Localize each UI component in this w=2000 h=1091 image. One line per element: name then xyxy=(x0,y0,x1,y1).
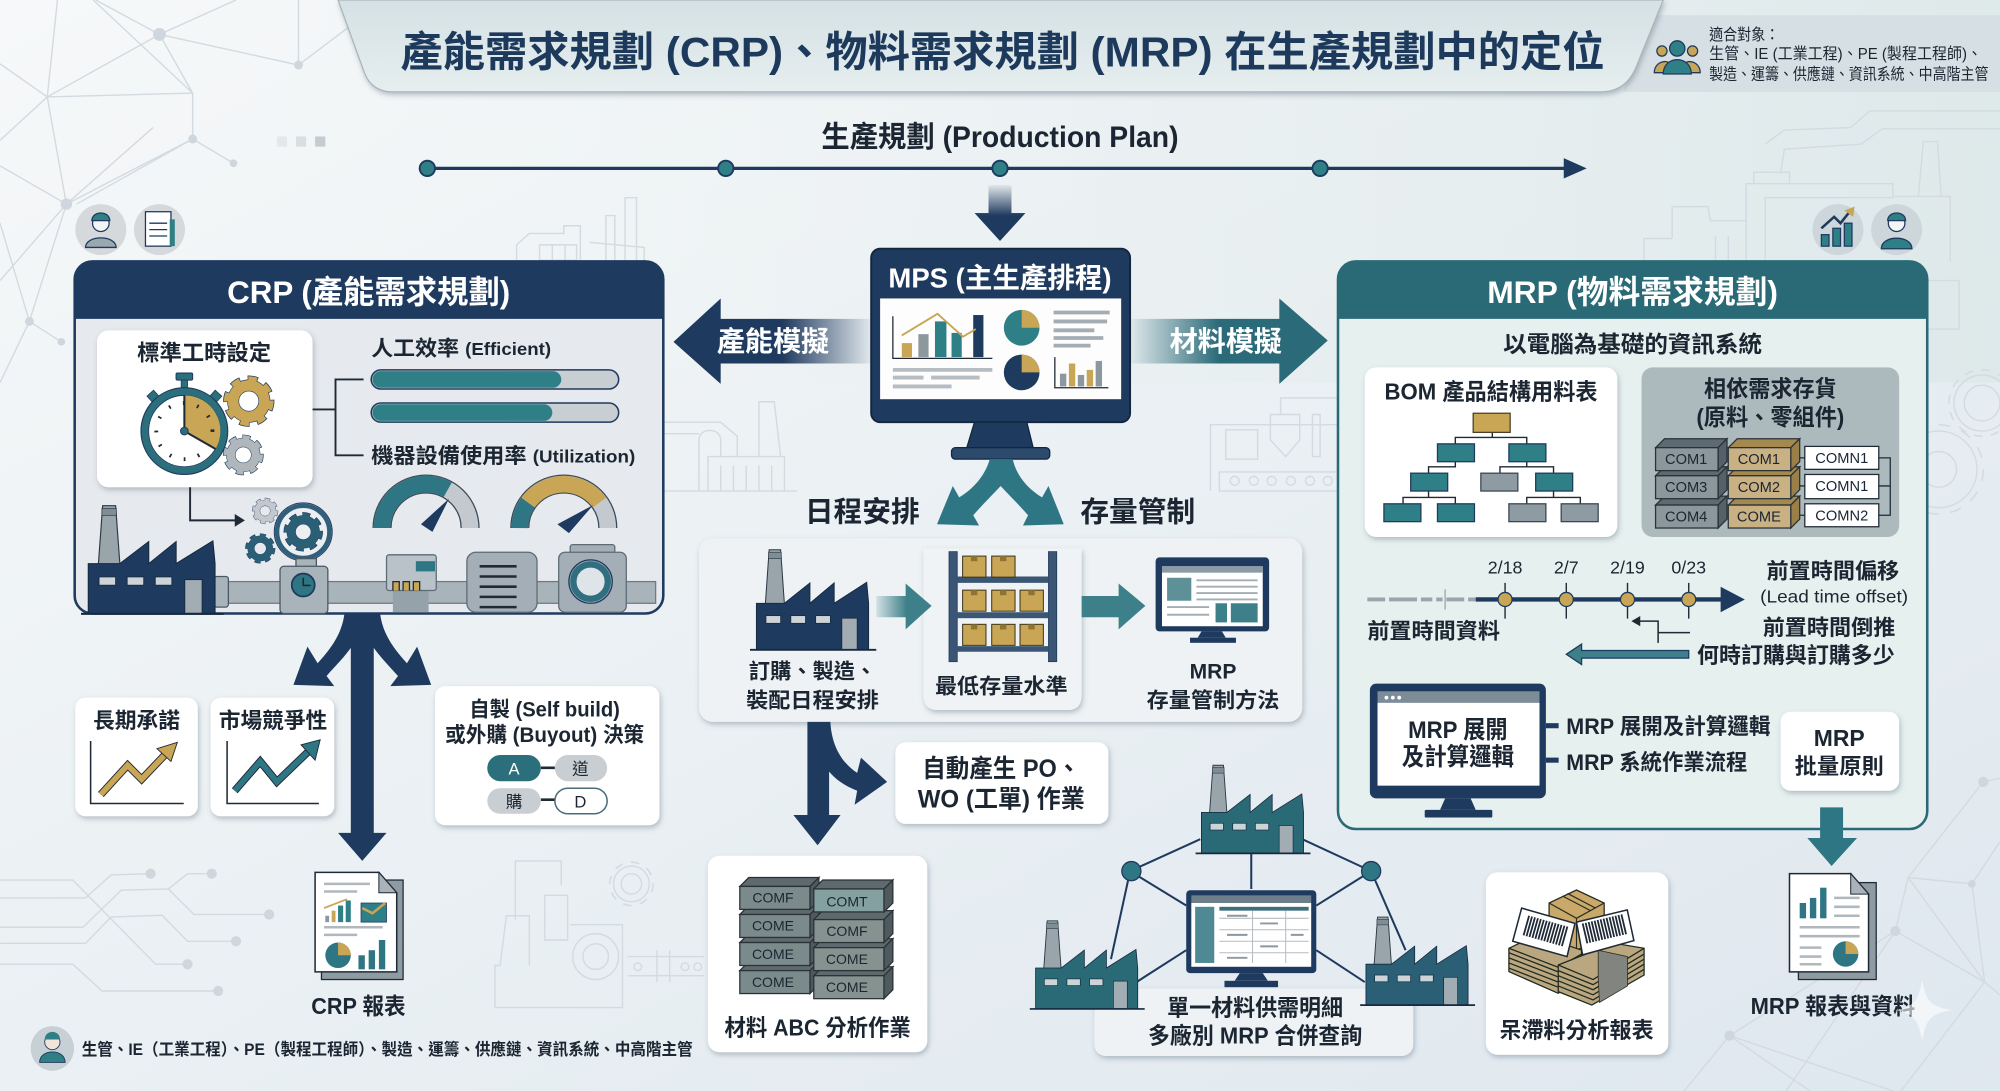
sparkle xyxy=(1895,980,1951,1041)
card: dead stock report: 呆滯料分析報表 xyxy=(1499,1018,1654,1043)
monitor: data table xyxy=(1186,890,1316,987)
label: MRP inventory method xyxy=(1147,660,1279,713)
panel: schedule and inventory xyxy=(699,538,1302,722)
inventory boxes: COMN1 xyxy=(1815,479,1868,495)
card: BOM xyxy=(1365,367,1617,537)
arrow: capacity simulation xyxy=(673,298,871,384)
card: single material query xyxy=(1094,988,1413,1056)
card: dependent demand inventory: 相依需求存貨 xyxy=(1704,376,1837,402)
card: minimum stock xyxy=(923,548,1082,710)
arrow: material simulation: 材料模擬 xyxy=(1170,326,1282,357)
production plan timeline xyxy=(420,121,1587,179)
monitor: MRP logic: MRP 展開 xyxy=(1408,717,1508,744)
icon: factory xyxy=(750,550,876,650)
MPS heading: MPS (主生產排程) xyxy=(888,262,1112,293)
arrow: MRP to report xyxy=(1807,807,1857,866)
monitor: MRP logic: 及計算邏輯 xyxy=(1402,744,1514,771)
heading: CRP: CRP (產能需求規劃) xyxy=(227,274,510,310)
connectors xyxy=(1546,723,1559,763)
title: 產能需求規劃 (CRP)、物料需求規劃 (MRP) 在生產規劃中的定位 xyxy=(401,29,1605,76)
label: ordering schedule: 訂購、製造、 xyxy=(749,659,876,683)
inventory boxes: COM1 xyxy=(1738,452,1780,468)
label: efficiency: 人工效率 (Efficient) xyxy=(371,337,551,361)
bracket connector xyxy=(313,379,364,455)
inventory boxes: COM4 xyxy=(1665,510,1707,526)
label: MRP logic list: MRP 系統作業流程 xyxy=(1566,750,1747,775)
arrow: factory to shelf xyxy=(876,584,932,629)
icon: MRP report document xyxy=(1789,874,1876,980)
timeline dates xyxy=(1488,557,1706,577)
inventory boxes xyxy=(1656,439,1890,528)
label: MRP logic list xyxy=(1566,714,1770,775)
icon: monitor xyxy=(1156,557,1269,643)
label: single material multi-plant: 單一材料供需明細 xyxy=(1167,994,1343,1020)
small back arrow xyxy=(1631,616,1690,643)
icon: stopwatch with gears xyxy=(141,373,270,474)
card: lot-sizing xyxy=(1781,712,1899,791)
inventory boxes: COM1 xyxy=(1665,452,1707,468)
boxes right stack xyxy=(814,880,893,999)
card: long-term commitment xyxy=(75,698,198,816)
icons: CRP roles xyxy=(75,204,185,255)
tree diagram xyxy=(1384,413,1598,522)
label: single material multi-plant xyxy=(1148,994,1362,1048)
audience text xyxy=(1709,26,1988,83)
boxes right stack: COMF xyxy=(826,923,868,939)
monitor: MRP logic xyxy=(1370,684,1546,818)
label: lead time data: 前置時間資料 xyxy=(1367,619,1500,644)
label: MRP inventory method: 存量管制方法 xyxy=(1147,688,1279,713)
boxes left stack: COMF xyxy=(752,890,794,906)
audience text: 生管、IE (工業工程)、PE (製程工程師)、 xyxy=(1709,44,1982,63)
card: dependent demand inventory xyxy=(1642,367,1899,537)
inventory boxes: COM2 xyxy=(1738,480,1780,496)
decision pills: A xyxy=(509,759,521,778)
boxes left stack: COME xyxy=(752,918,794,934)
inventory boxes: COME xyxy=(1737,510,1781,526)
card: lot-sizing: 批量原則 xyxy=(1795,754,1884,779)
label: MRP inventory method: MRP xyxy=(1190,660,1236,683)
icon: CRP report document xyxy=(315,872,403,980)
decision pills: 購 xyxy=(506,792,522,811)
timeline dates: 2/18 xyxy=(1488,557,1523,577)
decision pills: D xyxy=(574,792,586,811)
hollow teal arrow xyxy=(1566,644,1689,664)
card: lot-sizing: MRP xyxy=(1814,725,1865,751)
arrow: time to machinery xyxy=(190,487,237,520)
boxes right stack: COME xyxy=(826,979,868,995)
diagram: multi-plant network xyxy=(1030,765,1475,1009)
arrows: MPS split xyxy=(937,459,1064,525)
label: lead time offset: (Lead time offset) xyxy=(1760,587,1908,607)
label: utilization: 機器設備使用率 (Utilization) xyxy=(371,444,635,468)
card: dead stock report xyxy=(1486,872,1668,1055)
panel: CRP xyxy=(75,261,663,614)
inventory boxes: COM3 xyxy=(1665,480,1707,496)
card: dependent demand inventory: (原料、零組件) xyxy=(1696,404,1844,430)
arrow: capacity simulation: 產能模擬 xyxy=(717,326,829,357)
MPS screen dashboard xyxy=(880,298,1121,399)
boxes left stack xyxy=(740,877,819,994)
label: scheduling: 日程安排 xyxy=(805,496,920,528)
card: standard time: 標準工時設定 xyxy=(137,341,271,366)
footer audience: 生管、IE（工業工程）、PE（製程工程師）、製造、運籌、供應鏈、資訊系統、中高階主管 xyxy=(82,1039,693,1059)
label: lead time offset: 前置時間偏移 xyxy=(1767,559,1900,584)
label: lead time back-calc: 前置時間倒推 xyxy=(1763,615,1895,640)
boxes left stack: COME xyxy=(752,974,794,990)
audience text: 適合對象： xyxy=(1709,26,1779,44)
factory line illustration xyxy=(81,500,656,614)
card: make or buy: 自製 (Self build) xyxy=(469,698,620,722)
label: single material multi-plant: 多廠別 MRP 合併查詢 xyxy=(1148,1022,1362,1048)
decision pills: 道 xyxy=(572,759,589,778)
card: make or buy xyxy=(435,686,659,825)
card: make or buy: 或外購 (Buyout) 決策 xyxy=(445,723,644,747)
heading: MRP: MRP (物料需求規劃) xyxy=(1487,274,1778,310)
shelf crates xyxy=(963,556,1043,645)
heading: production plan: 生產規劃 (Production Plan) xyxy=(821,121,1179,154)
arrow: schedule to ABC and PO xyxy=(793,722,887,845)
label: CRP report: CRP 報表 xyxy=(311,993,406,1019)
bars: efficiency xyxy=(371,370,619,422)
card: standard time xyxy=(97,330,313,487)
card: ABC analysis xyxy=(708,856,927,1052)
card: auto PO WO: WO (工單) 作業 xyxy=(918,785,1085,813)
arrow: material simulation xyxy=(1130,298,1328,384)
timeline dates: 0/23 xyxy=(1671,557,1706,577)
lead time timeline xyxy=(1367,557,1745,619)
footer audience xyxy=(31,1026,693,1071)
label: lead time offset xyxy=(1760,559,1908,607)
label: inventory control: 存量管制 xyxy=(1080,496,1195,528)
timeline dates: 2/7 xyxy=(1554,557,1579,577)
timeline line and nodes xyxy=(420,158,1587,179)
monitor: MPS xyxy=(871,249,1130,459)
arrows: CRP outputs xyxy=(293,613,431,861)
label: when and how much: 何時訂購與訂購多少 xyxy=(1697,643,1895,668)
card: market competitiveness: 市場競爭性 xyxy=(219,708,327,733)
card: auto PO WO: 自動產生 PO、 xyxy=(922,755,1080,783)
gauge 1 xyxy=(382,484,470,532)
card: minimum stock: 最低存量水準 xyxy=(935,675,1068,699)
arrow: shelf to monitor xyxy=(1082,584,1145,629)
label: ordering schedule: 裝配日程安排 xyxy=(746,688,879,713)
gauge 2 xyxy=(520,484,608,533)
card: auto PO WO xyxy=(895,742,1108,824)
audience panel xyxy=(1622,15,2000,92)
subheading: 以電腦為基礎的資訊系統 xyxy=(1503,331,1762,357)
panel: MRP xyxy=(1338,261,1927,829)
label: MRP report: MRP 報表與資料 xyxy=(1751,993,1915,1019)
inventory boxes: COMN2 xyxy=(1815,508,1868,524)
card: long-term commitment: 長期承諾 xyxy=(93,708,180,733)
label: ordering schedule xyxy=(746,659,879,713)
icons: MRP roles xyxy=(1812,204,1922,255)
timeline dates: 2/19 xyxy=(1610,557,1645,577)
boxes right stack: COMT xyxy=(826,893,868,909)
inventory boxes: COMN1 xyxy=(1815,451,1868,467)
card: BOM: BOM 產品結構用料表 xyxy=(1385,378,1598,404)
boxes right stack: COME xyxy=(826,951,868,967)
icon: people group xyxy=(1654,41,1700,74)
card: ABC analysis: 材料 ABC 分析作業 xyxy=(725,1015,911,1041)
decision pills xyxy=(487,755,607,814)
title banner xyxy=(338,0,1663,92)
boxes left stack: COME xyxy=(752,946,794,962)
icon: stacked boxes with barcodes xyxy=(1509,890,1644,1005)
arrow: plan to MPS xyxy=(974,185,1026,241)
card: market competitiveness xyxy=(211,698,334,816)
label: MRP logic list: MRP 展開及計算邏輯 xyxy=(1566,714,1770,739)
